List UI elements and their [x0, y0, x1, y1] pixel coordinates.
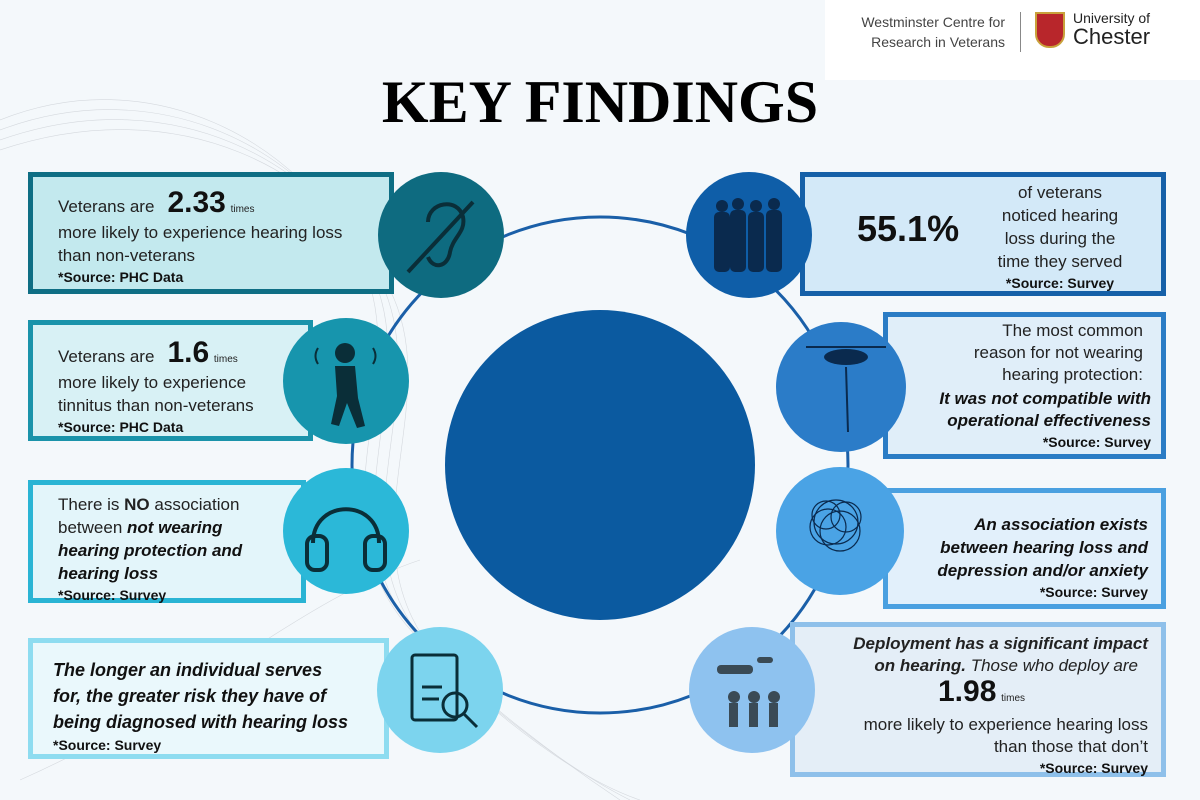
icon: helicopter — [776, 322, 906, 452]
panel: right 1: time they served — [998, 252, 1122, 271]
panel: right 3: *Source: Survey — [1040, 584, 1148, 600]
logo: University of — [1073, 10, 1150, 26]
panel: right 1 — [800, 172, 1166, 296]
title: KEY FINDINGS — [382, 69, 818, 135]
panel: right 3: An association exists — [974, 515, 1148, 534]
panel: right 3: depression and/or anxiety — [937, 561, 1148, 580]
panel: left 3: hearing loss — [58, 564, 158, 583]
icon: scribble — [776, 467, 904, 595]
panel: left 1: Veterans are 2.33 times — [58, 186, 254, 219]
panel: left 1 — [28, 172, 394, 294]
panel: left 3: hearing protection and — [58, 541, 242, 560]
panel: right 4: on hearing. Those who deploy are more likely to experience hearing loss — [864, 656, 1148, 734]
center circle — [445, 310, 755, 620]
panel: left 4: being diagnosed with hearing loss — [53, 712, 348, 732]
panel: right 4: *Source: Survey — [1040, 760, 1148, 776]
panel: right 1: of veterans — [1018, 183, 1102, 202]
panel: right 2 — [883, 312, 1166, 459]
logo — [825, 0, 1200, 80]
panel: right 4 — [790, 622, 1166, 777]
panel: right 2: *Source: Survey — [1043, 434, 1151, 450]
panel: right 1: noticed hearing — [1002, 206, 1118, 225]
panel: right 2: It was not compatible with — [939, 389, 1151, 408]
panel: left 3: There is NO association — [58, 495, 239, 514]
panel: right 2: The most common — [1002, 321, 1143, 340]
icon: clipboard — [377, 627, 503, 753]
icon: deployment — [689, 627, 815, 753]
icon: headphones — [283, 468, 409, 594]
panel: left 2: *Source: PHC Data — [58, 419, 183, 435]
panel: right 4: than those that don’t — [994, 737, 1148, 756]
panel: left 2: more likely to experience — [58, 373, 246, 392]
panel: left 4: *Source: Survey — [53, 737, 161, 753]
icon: soldiers — [686, 172, 812, 298]
icon: tinnitus person — [283, 318, 409, 444]
icon: ear crossed — [378, 172, 504, 298]
panel: right 2: operational effectiveness — [947, 411, 1151, 430]
panel: right 3: between hearing loss and — [940, 538, 1148, 557]
logo: Westminster Centre for Research in Veterans — [861, 14, 1005, 50]
panel: right 2: hearing protection: — [1002, 365, 1143, 384]
panel: right 4: 1.98 times — [938, 675, 1025, 708]
panel: left 3 — [28, 480, 306, 603]
panel: right 1: *Source: Survey — [1006, 275, 1114, 291]
panel: left 4 — [28, 638, 389, 759]
panel: left 3: between not wearing — [58, 518, 222, 537]
panel: left 1: *Source: PHC Data — [58, 269, 183, 285]
panel: right 4: Deployment has a significant impact — [853, 634, 1148, 653]
panel: left 2: Veterans are 1.6 times — [58, 336, 238, 369]
panel: right 1: 55.1% — [857, 208, 959, 249]
panel: right 2: reason for not wearing — [974, 343, 1143, 362]
panel: left 2: tinnitus than non-veterans — [58, 396, 254, 415]
panel: left 1: than non-veterans — [58, 246, 195, 265]
logo: Chester — [1073, 24, 1150, 49]
ring — [352, 217, 848, 713]
panel: left 3: *Source: Survey — [58, 587, 166, 603]
panel: right 1: loss during the — [1005, 229, 1115, 248]
panel: left 4: The longer an individual serves — [53, 660, 322, 680]
panel: right 3 — [883, 488, 1166, 609]
panel: left 1: more likely to experience hearing loss — [58, 223, 342, 242]
panel: left 2 — [28, 320, 313, 441]
panel: left 4: for, the greater risk they have of — [53, 686, 326, 706]
